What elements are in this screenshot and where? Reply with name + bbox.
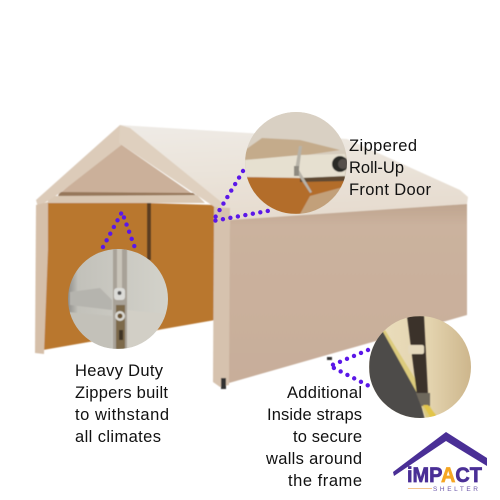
text: additional inside straps — [265, 384, 362, 490]
text: additional inside straps: the frame — [288, 472, 362, 490]
side wall — [222, 204, 467, 385]
detail circle: roll-up door — [245, 112, 348, 214]
door centre seam — [147, 202, 151, 260]
right gable trim — [119, 125, 225, 208]
front right post — [213, 207, 230, 387]
detail circle: zipper — [68, 249, 168, 349]
logo underline — [408, 488, 432, 489]
roof side panel — [120, 125, 468, 222]
logo roof icon — [393, 432, 487, 476]
text: zippered roll-up front door: Front Door — [349, 181, 432, 199]
front gable panel — [58, 143, 197, 197]
rear foot — [327, 357, 332, 360]
logo: impact shelter — [393, 432, 487, 493]
text: heavy duty zippers — [75, 362, 169, 446]
dotted callout: roll-up door — [213, 171, 273, 221]
logo subtitle: SHELTER — [433, 486, 478, 493]
detail circle: frame strap — [369, 316, 471, 420]
dotted callout: zipper — [103, 212, 135, 248]
text: zippered roll-up front door: Roll-Up — [349, 159, 404, 177]
front orange door — [43, 200, 215, 350]
text: additional inside straps: Additional — [287, 384, 362, 402]
text: heavy duty zippers: to withstand — [75, 406, 169, 424]
text: zippered roll-up front door: Zippered — [349, 137, 417, 155]
text: heavy duty zippers: Zippers built — [75, 384, 168, 402]
infographic canvas — [34, 112, 487, 491]
carport tent photo — [35, 125, 468, 389]
text: additional inside straps: to secure — [293, 428, 362, 446]
left gable trim — [36, 125, 124, 207]
text: zippered roll-up front door — [349, 137, 432, 199]
text: heavy duty zippers: Heavy Duty — [75, 362, 164, 380]
post foot — [221, 378, 226, 389]
dotted callout: straps — [330, 350, 373, 388]
text: heavy duty zippers: all climates — [75, 428, 161, 446]
gable base shadow — [58, 192, 197, 196]
text: additional inside straps: walls around — [265, 450, 362, 468]
left post — [35, 202, 48, 354]
text: additional inside straps: Inside straps — [267, 406, 362, 424]
logo wordmark: iMPACT — [407, 464, 482, 487]
horizontal door bar — [48, 195, 205, 203]
